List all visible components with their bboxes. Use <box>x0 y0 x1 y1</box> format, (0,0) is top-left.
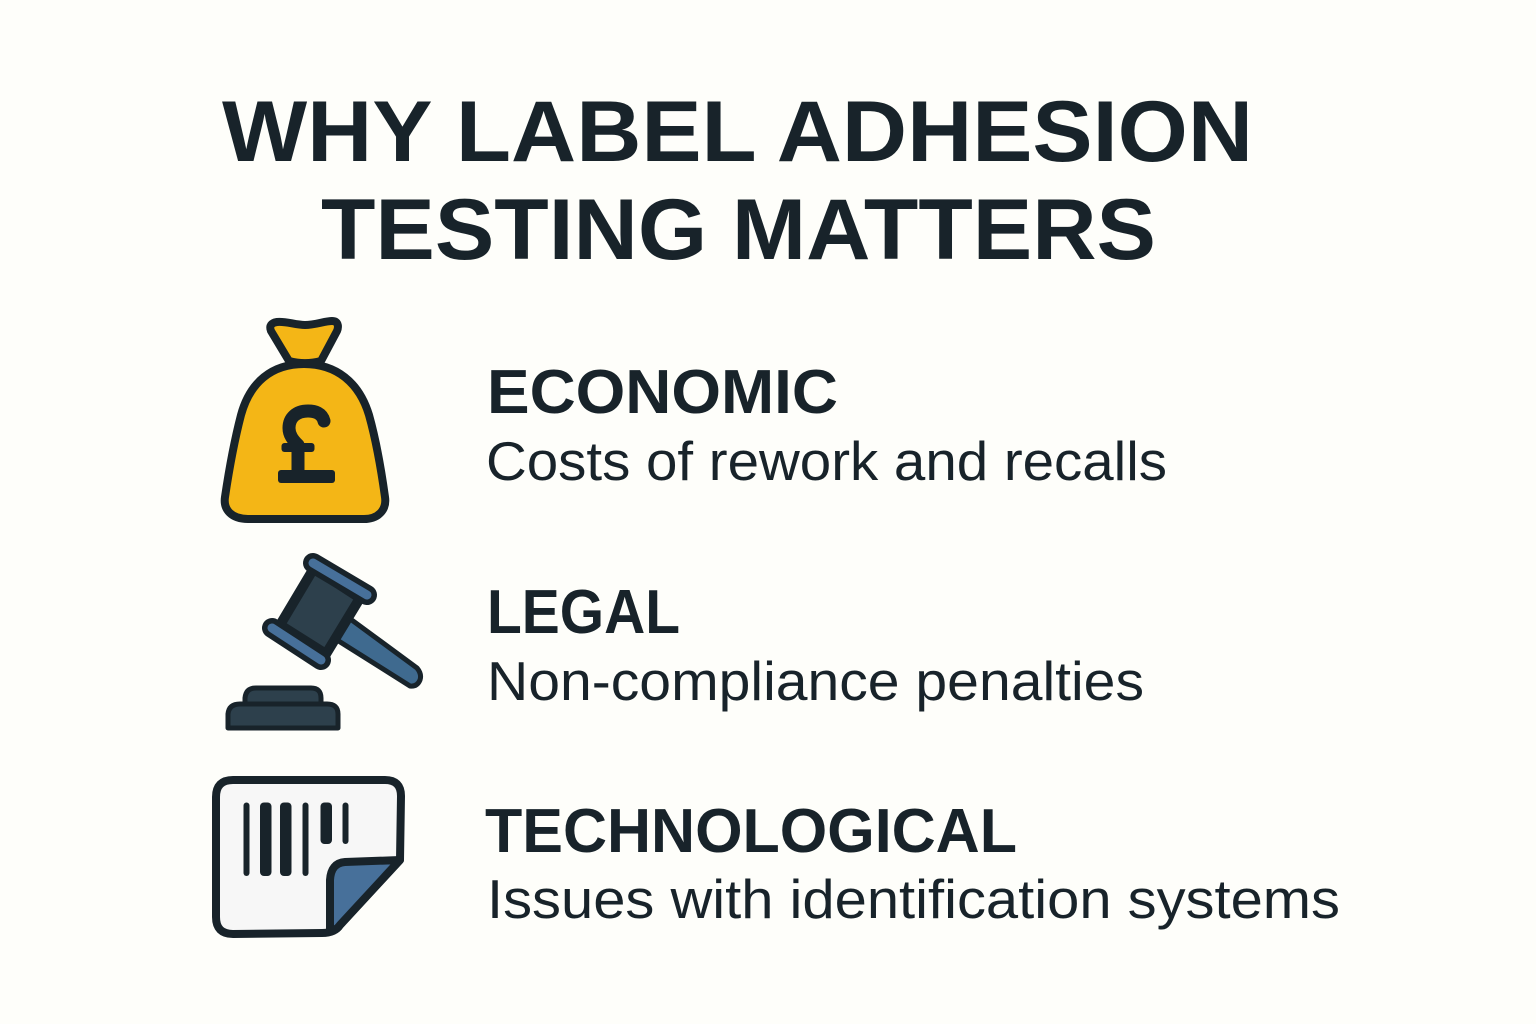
text block: technological: Issues with identification systems <box>487 868 1340 930</box>
icon: money bag <box>225 321 385 519</box>
text block: legal <box>487 578 1144 712</box>
text block: economic: Costs of rework and recalls <box>486 430 1167 492</box>
title: TESTING MATTERS <box>321 182 1156 278</box>
text block: legal: Non-compliance penalties <box>487 650 1144 712</box>
text block: economic <box>486 358 1167 492</box>
icon: peeling barcode label <box>216 780 401 934</box>
text block: economic: ECONOMIC <box>487 358 838 427</box>
text block: technological <box>485 797 1340 930</box>
text block: technological: TECHNOLOGICAL <box>485 797 1017 866</box>
title: WHY LABEL ADHESION <box>222 84 1253 180</box>
icon: gavel <box>228 563 421 728</box>
title <box>222 84 1253 278</box>
text block: legal: LEGAL <box>487 578 680 647</box>
